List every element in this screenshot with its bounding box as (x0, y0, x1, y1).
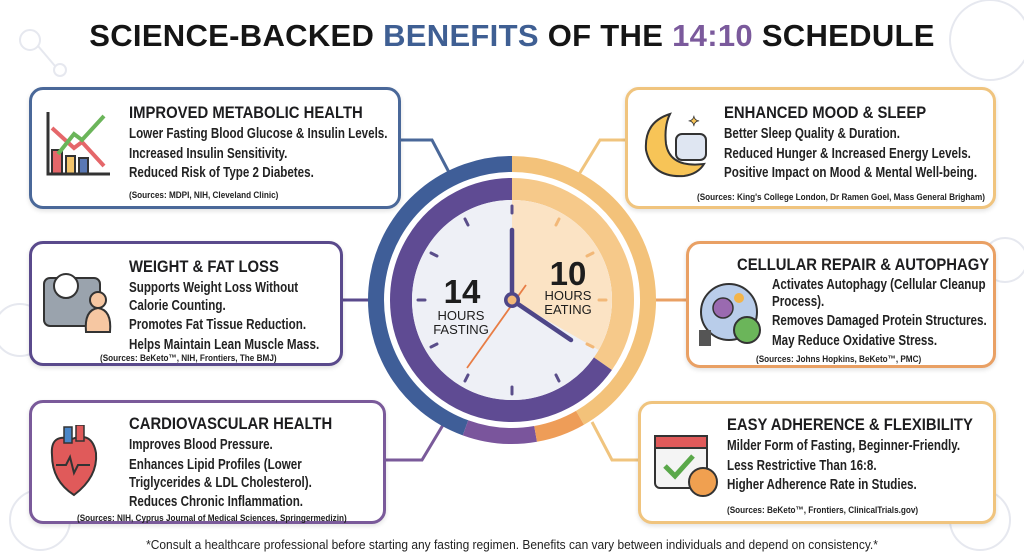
panel: weight loss (29, 241, 343, 366)
eating label (544, 255, 592, 317)
text: Milder Form of Fasting, Beginner-Friendly. (727, 438, 960, 454)
fasting label: FASTING (433, 322, 489, 337)
heading: EASY ADHERENCE & FLEXIBILITY (727, 416, 973, 434)
heading: CARDIOVASCULAR HEALTH (129, 415, 332, 433)
text: Calorie Counting. (129, 298, 226, 314)
text: Activates Autophagy (Cellular Cleanup (772, 277, 986, 293)
sources: (Sources: King's College London, Dr Ramen Goel, Mass General Brigham) (697, 192, 985, 203)
text: Less Restrictive Than 16:8. (727, 458, 877, 474)
panel: mood & sleep (625, 87, 996, 209)
text: Supports Weight Loss Without (129, 280, 298, 296)
icon: chart (46, 112, 110, 176)
footnote: *Consult a healthcare professional before starting any fasting regimen. Benefits can vary between individuals and depend on consistency.* (146, 537, 878, 552)
panel: cardiovascular: Triglycerides & LDL Cholesterol). (129, 475, 312, 491)
fasting label: 14 (444, 273, 481, 310)
text (129, 126, 387, 181)
sources: (Sources: MDPI, NIH, Cleveland Clinic) (129, 190, 278, 201)
text (772, 277, 986, 310)
title: SCIENCE-BACKED BENEFITS OF THE 14:10 SCHEDULE (89, 18, 935, 53)
text: Process). (772, 294, 824, 310)
panel: cardiovascular: Reduces Chronic Inflammation. (129, 494, 303, 510)
text: Higher Adherence Rate in Studies. (727, 477, 917, 493)
text: Positive Impact on Mood & Mental Well-being. (724, 165, 977, 181)
fasting label: HOURS (438, 308, 485, 323)
icon: scale (43, 273, 112, 333)
icon: moon (644, 112, 707, 178)
sources: (Sources: Johns Hopkins, BeKeto™, PMC) (756, 354, 921, 365)
heading: CELLULAR REPAIR & AUTOPHAGY (737, 256, 989, 274)
icon: cell (699, 283, 761, 346)
icon: moon: ✦ (688, 113, 700, 129)
text: Better Sleep Quality & Duration. (724, 126, 900, 142)
panel: cellular repair (686, 241, 996, 368)
icon: heart (50, 425, 98, 496)
text (724, 126, 977, 181)
panel: weight loss: Helps Maintain Lean Muscle Mass. (129, 336, 319, 352)
heading: IMPROVED METABOLIC HEALTH (129, 104, 363, 122)
panel: metabolic health (29, 87, 401, 209)
fasting label (433, 273, 489, 337)
eating label: EATING (544, 302, 592, 317)
text: Reduced Risk of Type 2 Diabetes. (129, 165, 314, 181)
text: Increased Insulin Sensitivity. (129, 146, 287, 162)
panel: adherence (638, 401, 996, 524)
icon: calendar (654, 435, 718, 497)
panel: weight loss: Promotes Fat Tissue Reduction. (129, 317, 306, 333)
panel: cardiovascular (29, 400, 386, 524)
eating label: HOURS (545, 288, 592, 303)
text (129, 280, 298, 314)
panel: cardiovascular: Enhances Lipid Profiles (Lower (129, 457, 302, 473)
heading: WEIGHT & FAT LOSS (129, 258, 279, 276)
text (727, 438, 960, 493)
text: Improves Blood Pressure. (129, 437, 273, 453)
text: Reduced Hunger & Increased Energy Levels. (724, 146, 971, 162)
panel: cellular repair: Removes Damaged Protein Structures. (772, 313, 987, 329)
panel: cellular repair: May Reduce Oxidative Stress. (772, 332, 937, 348)
text: Lower Fasting Blood Glucose & Insulin Levels. (129, 126, 387, 142)
heading: ENHANCED MOOD & SLEEP (724, 104, 926, 122)
eating label: 10 (550, 255, 586, 292)
sources: (Sources: BeKeto™, Frontiers, ClinicalTrials.gov) (727, 505, 918, 516)
sources: (Sources: NIH, Cyprus Journal of Medical Sciences, Springermedizin) (77, 513, 347, 524)
sources: (Sources: BeKeto™, NIH, Frontiers, The BMJ) (100, 353, 277, 364)
